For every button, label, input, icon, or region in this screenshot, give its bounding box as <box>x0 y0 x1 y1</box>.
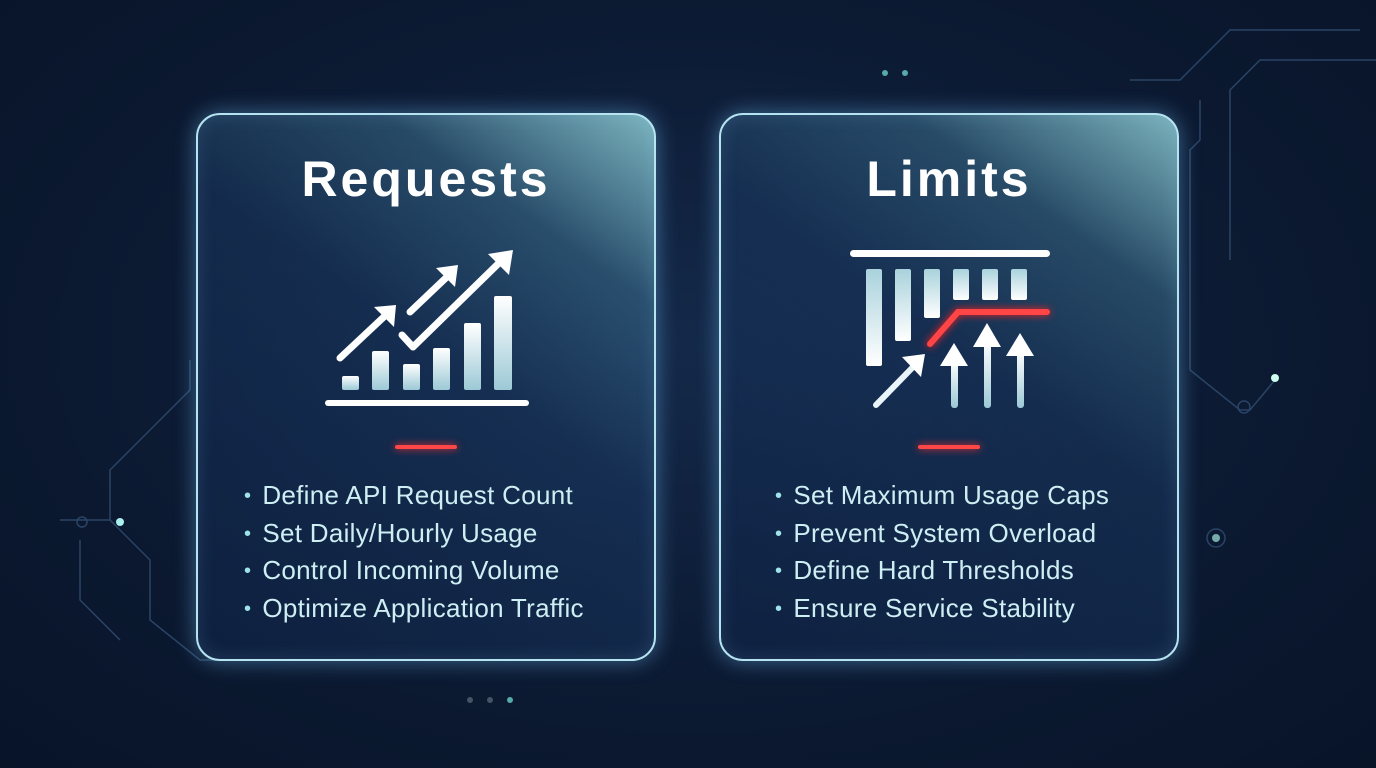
heading: requests: Requests <box>301 151 551 207</box>
list: limits: Set Maximum Usage Caps <box>793 480 1109 510</box>
panel: limits <box>719 113 1179 661</box>
list: limits <box>776 480 1109 623</box>
list: requests: Set Daily/Hourly Usage <box>262 518 538 548</box>
list: requests <box>244 480 584 623</box>
list: limits: Prevent System Overload <box>793 518 1096 548</box>
divider: requests red accent <box>395 445 457 449</box>
list: requests: Optimize Application Traffic <box>262 593 584 623</box>
list: limits: Define Hard Thresholds <box>793 555 1074 585</box>
panel: requests <box>196 113 656 661</box>
heading: limits: Limits <box>866 151 1032 207</box>
list: requests: Define API Request Count <box>262 480 573 510</box>
list: requests: Control Incoming Volume <box>262 555 560 585</box>
list: limits: Ensure Service Stability <box>793 593 1075 623</box>
divider: limits red accent <box>918 445 980 449</box>
